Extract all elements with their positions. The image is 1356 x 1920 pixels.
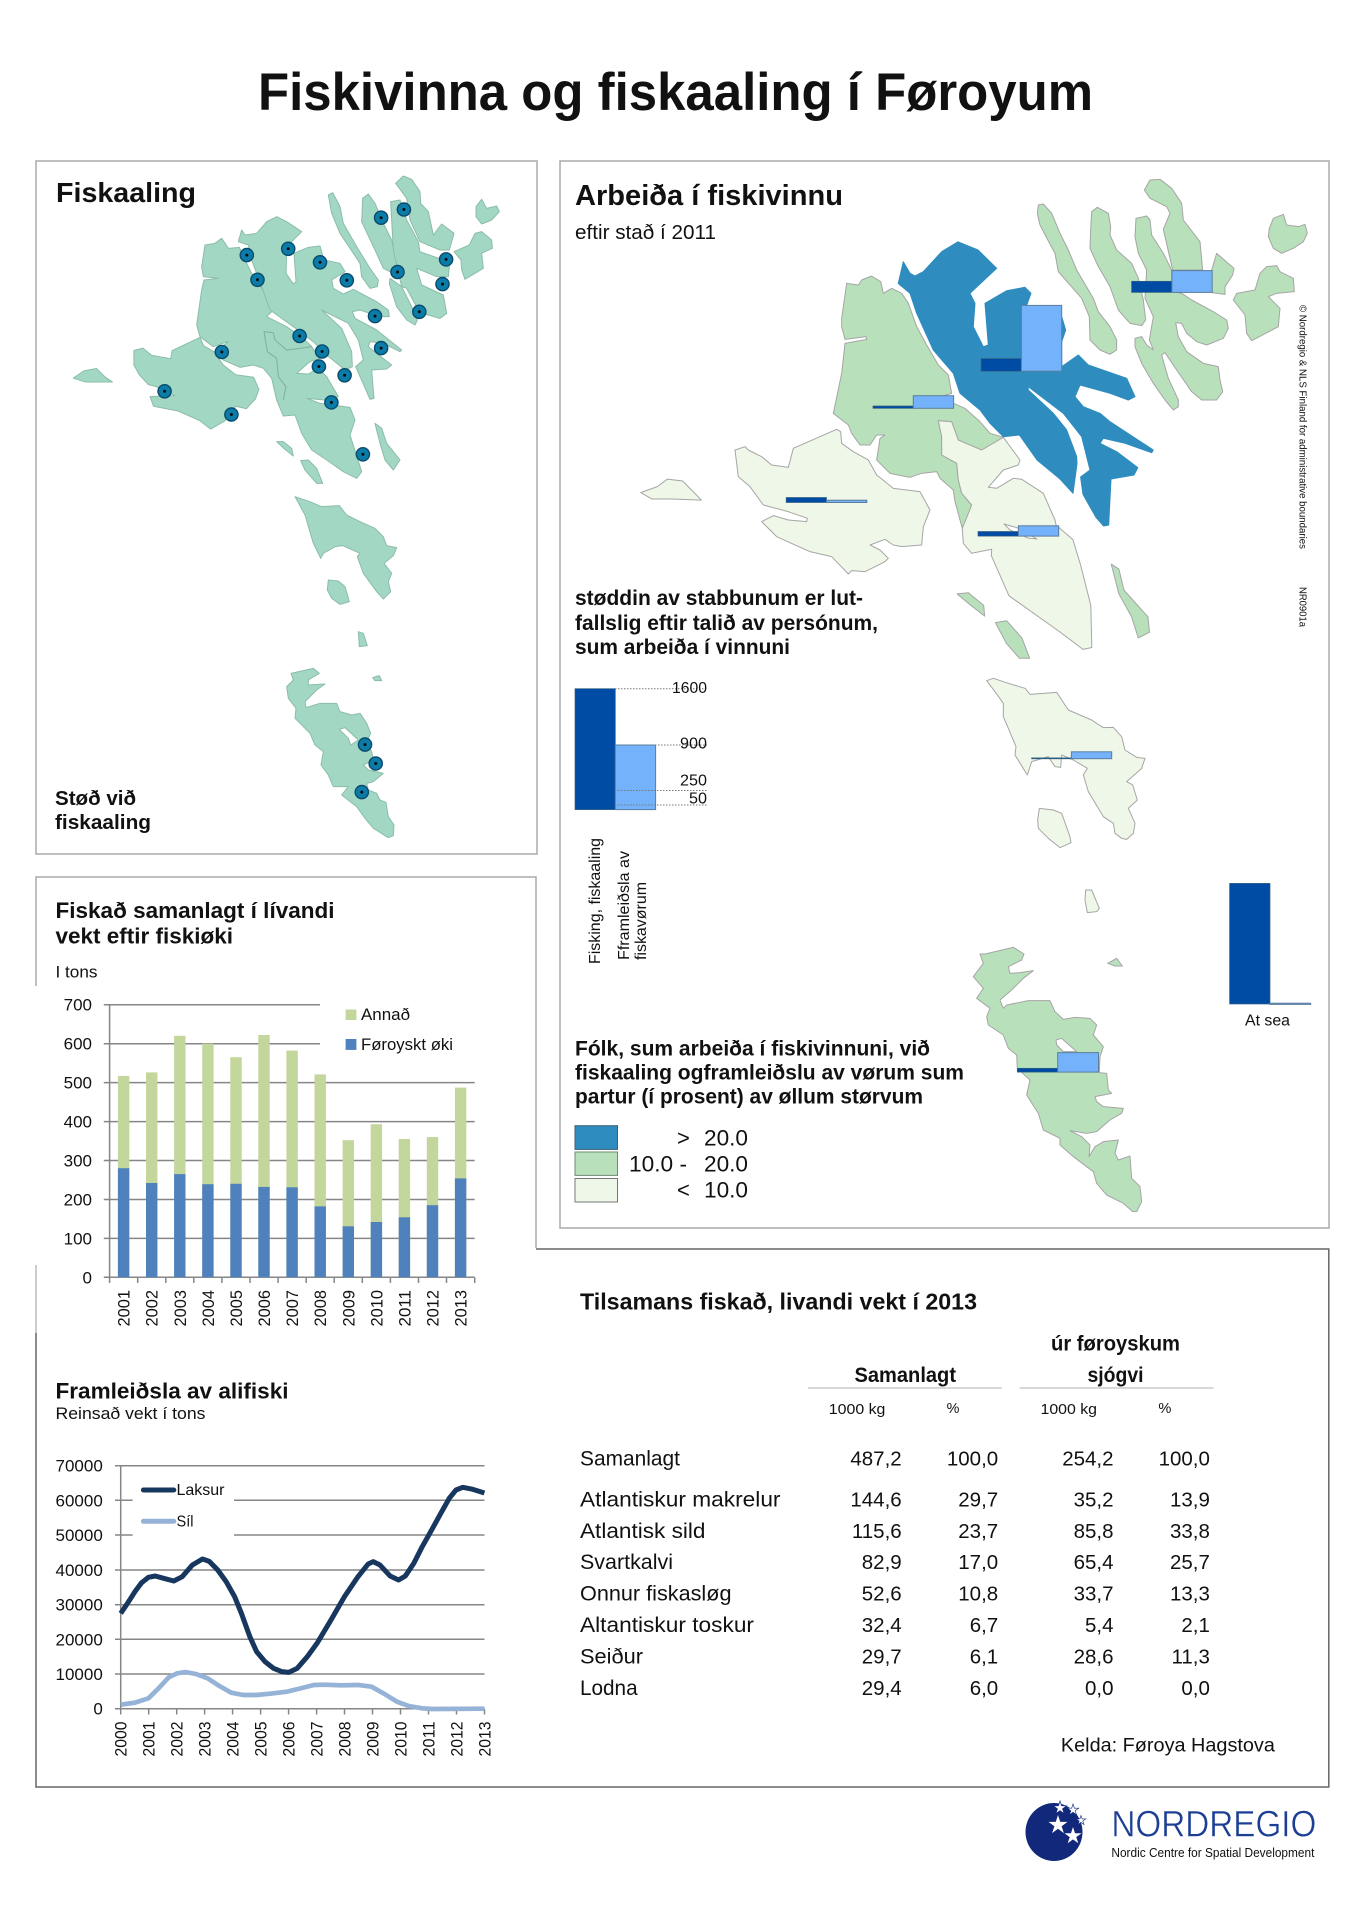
table row labels: Atlantiskur makrelur [580,1488,780,1512]
table values: 487,2 [850,1448,902,1470]
chart legend: Síl [176,1514,194,1531]
table row labels: Svartkalvi [580,1550,673,1574]
heading: Fiskað samanlagt [56,898,334,948]
chart legend: Føroyskt øki [361,1036,453,1054]
table row labels: Seiður [580,1644,643,1668]
table values: 100,0 [947,1448,998,1470]
table values: 33,7 [1074,1582,1114,1606]
x axis labels: 2003 [171,1290,190,1326]
legend: bar scale: Fframleiðsla av [616,851,633,960]
subheading: eftir stað í 2011: eftir stað í 2011 [575,222,716,244]
table column headers: sjógvi [1088,1364,1144,1387]
y axis labels: 400 [64,1113,92,1132]
table values: 144,6 [850,1488,902,1512]
text block: share explanation: fiskaaling ogframleiðslu av vørum sum [575,1062,964,1084]
y axis labels [56,1457,103,1719]
table values: 5,4 [1085,1614,1114,1637]
chart grid and axes [104,1005,475,1283]
legend: bar scale: 50 [689,790,707,808]
table values: 65,4 [1074,1551,1114,1574]
legend: bar scale: Fisking, fiskaaling [587,838,604,964]
x axis labels: 2012 [424,1290,442,1326]
line: Laksur [121,1487,484,1672]
y axis labels: 50000 [56,1526,103,1545]
x axis labels: 2010 [392,1722,410,1756]
source note: Kelda: Føroya Hagstova [1061,1736,1275,1756]
y axis labels: 0 [83,1268,92,1287]
map: fish farming site markers [158,203,453,799]
x axis labels: 2011 [420,1722,438,1756]
x axis labels: 2011 [395,1290,414,1326]
bars: Føroyskt øki [118,1168,466,1277]
x axis labels: 2002 [169,1722,187,1756]
table unit labels: % [947,1400,959,1417]
table values: 35,2 [1074,1488,1114,1512]
x axis labels: 2007 [283,1290,302,1326]
legend: colour classes: > [677,1126,690,1150]
table values: 29,4 [862,1677,902,1700]
y axis labels: 100 [64,1229,92,1248]
map bars: employment by region [786,271,1212,1072]
table column headers: úr føroyskum [1051,1332,1180,1356]
table row labels: Samanlagt [580,1446,680,1470]
table values: 6,0 [970,1677,998,1700]
table values: 0,0 [1085,1677,1114,1700]
legend: bar scale: 1600 [672,680,707,697]
x axis labels: 2008 [336,1722,354,1756]
text block: bar size explanation: fallslig eftir talið av persónum, [575,612,878,635]
legend: bar scale: 900 [680,736,707,752]
x axis labels: 2002 [143,1290,162,1326]
table values: 82,9 [862,1551,902,1574]
table values: 28,6 [1074,1646,1114,1668]
x axis labels: 2001 [115,1290,134,1326]
panel: catch table [580,1288,1275,1756]
panel: lower frame for charts and table [36,877,1329,1787]
x axis labels: 2008 [311,1290,330,1326]
x axis labels: 2009 [364,1722,382,1756]
y axis labels: 200 [64,1190,92,1210]
y axis labels: 20000 [56,1630,103,1649]
y axis labels [64,996,92,1287]
table values [850,1448,1210,1700]
icon: starred globe [1026,1801,1086,1861]
map: islands [73,176,499,838]
chart legend: Laksur [176,1482,225,1499]
table unit labels: 1000 kg [1040,1401,1097,1418]
table values: 13,3 [1170,1582,1210,1606]
legend: colour classes [575,1126,748,1202]
table values: 100,0 [1159,1448,1210,1470]
y axis labels: 60000 [56,1491,103,1510]
legend: colour classes: 20.0 [704,1152,748,1176]
caption: Støð við fiskaaling: fiskaaling [55,812,151,834]
table values: 17,0 [958,1551,998,1574]
x axis labels: 2013 [452,1290,471,1326]
at sea bar [1230,883,1311,1030]
table values: 254,2 [1062,1448,1114,1470]
heading: Fiskað samanlagt: vekt eftir fiskiøki [56,924,233,948]
y axis labels: 30000 [56,1596,103,1615]
panel: catch by fishing area bar chart [56,898,475,1326]
table values: 85,8 [1074,1520,1114,1543]
panel: Fiskaaling map [36,161,537,854]
y axis labels: 70000 [56,1457,103,1476]
table values: 11,3 [1172,1646,1210,1668]
legend: colour classes: < [677,1178,690,1202]
heading: Fiskað samanlagt: Fiskað samanlagt í lívandi [56,898,334,923]
table row labels: Lodna [580,1676,638,1700]
text block: bar size explanation: sum arbeiða í vinnuni [575,636,790,659]
subheading: Reinsað vekt í tons: Reinsað vekt í tons [56,1405,206,1423]
legend: colour classes: 20.0 [704,1126,748,1150]
x axis labels: 2009 [339,1290,358,1326]
text block: bar size explanation [575,587,878,659]
text block: share explanation [575,1038,964,1108]
x axis labels: 2010 [367,1290,386,1326]
bars: Annað [118,1035,466,1277]
title: Fiskivinna og fiskaaling í Føroyum [258,63,1093,122]
x axis labels: 2012 [448,1722,466,1756]
y axis labels: 40000 [56,1561,103,1580]
chart grid and axes [115,1466,484,1714]
y axis labels: 10000 [56,1665,103,1684]
logo tagline: Nordic Centre for Spatial Development [1111,1845,1315,1860]
x axis labels: 2007 [309,1722,327,1756]
table unit labels [829,1400,1171,1418]
unit: I tons: I tons [56,964,98,982]
at sea bar: At sea [1245,1012,1290,1030]
caption: Støð við fiskaaling [55,788,151,834]
heading: Fiskaaling: Fiskaaling [56,177,196,208]
table row labels [580,1446,780,1700]
y axis labels: 300 [64,1152,92,1170]
table column headers [808,1332,1214,1388]
table values: 13,9 [1170,1488,1210,1512]
chart legend: Annað [361,1006,410,1024]
table title: Tilsamans fiskað, livandi vekt í 2013 [580,1288,977,1314]
table values: 2,1 [1181,1614,1210,1637]
table values: 52,6 [862,1582,902,1606]
caption: Støð við fiskaaling: Støð við [55,788,136,810]
x axis labels: 2006 [281,1722,299,1756]
logo wordmark: NORDREGIO [1111,1802,1316,1844]
table column headers: Samanlagt [854,1364,956,1387]
table values: 23,7 [958,1520,998,1543]
table values: 29,7 [958,1488,998,1512]
table row labels: Altantiskur toskur [580,1613,754,1637]
text block: bar size explanation: støddin av stabbunum er lut- [575,587,863,610]
table values: 6,1 [970,1646,998,1668]
table unit labels: 1000 kg [829,1401,885,1418]
text block: share explanation: partur (í prosent) av øllum størvum [575,1086,923,1108]
chart legend [143,1482,225,1531]
heading: Framleiðsla av alifiski: Framleiðsla av alifiski [56,1378,288,1403]
legend: bar scale: fiskavørum [633,882,650,960]
table values: 32,4 [862,1614,902,1637]
table values: 25,7 [1170,1551,1210,1574]
y axis labels: 0 [93,1700,103,1719]
table values: 29,7 [862,1646,902,1668]
table row labels: Atlantisk sild [580,1519,706,1543]
x axis labels: 2004 [199,1290,218,1326]
heading: Arbeiða í fiskivinnu: Arbeiða í fiskivinnu [575,180,843,212]
x axis labels [113,1722,494,1756]
x axis labels: 2006 [255,1290,274,1326]
table values: 33,8 [1170,1520,1210,1543]
x axis labels: 2005 [253,1722,271,1756]
y axis labels: 500 [64,1074,92,1093]
legend: colour classes: 10.0 - [629,1152,687,1176]
y axis labels: 600 [64,1035,92,1054]
table values: 10,8 [958,1582,998,1606]
panel: aquaculture line chart [56,1378,494,1756]
table values: 0,0 [1181,1677,1210,1700]
x axis labels: 2000 [113,1722,131,1756]
y axis labels: 700 [64,996,92,1015]
legend: bar scale [575,680,707,964]
x axis labels: 2005 [227,1290,246,1326]
table row labels: Onnur fiskasløg [580,1582,732,1606]
x axis labels: 2001 [141,1722,159,1756]
credit: map number: NR0901a [1296,587,1308,627]
x axis labels [115,1290,471,1326]
panel: Arbeiða í fiskivinnu map [560,161,1329,1228]
x axis labels: 2004 [225,1722,243,1756]
table values: 115,6 [852,1520,902,1543]
credit: copyright: © Nordregio & NLS Finland for administrative boundaries [1296,305,1308,549]
x axis labels: 2013 [476,1722,494,1756]
legend: colour classes: 10.0 [704,1178,748,1202]
table values: 6,7 [970,1614,998,1637]
x axis labels: 2003 [197,1722,215,1756]
line: Síl [121,1672,484,1709]
logo: Nordregio [1026,1801,1316,1861]
legend: bar scale: 250 [680,772,707,790]
chart legend [346,1006,453,1054]
text block: share explanation: Fólk, sum arbeiða í fiskivinnuni, við [575,1038,930,1060]
table unit labels: % [1158,1400,1171,1417]
choropleth map: municipalities [641,179,1307,1212]
